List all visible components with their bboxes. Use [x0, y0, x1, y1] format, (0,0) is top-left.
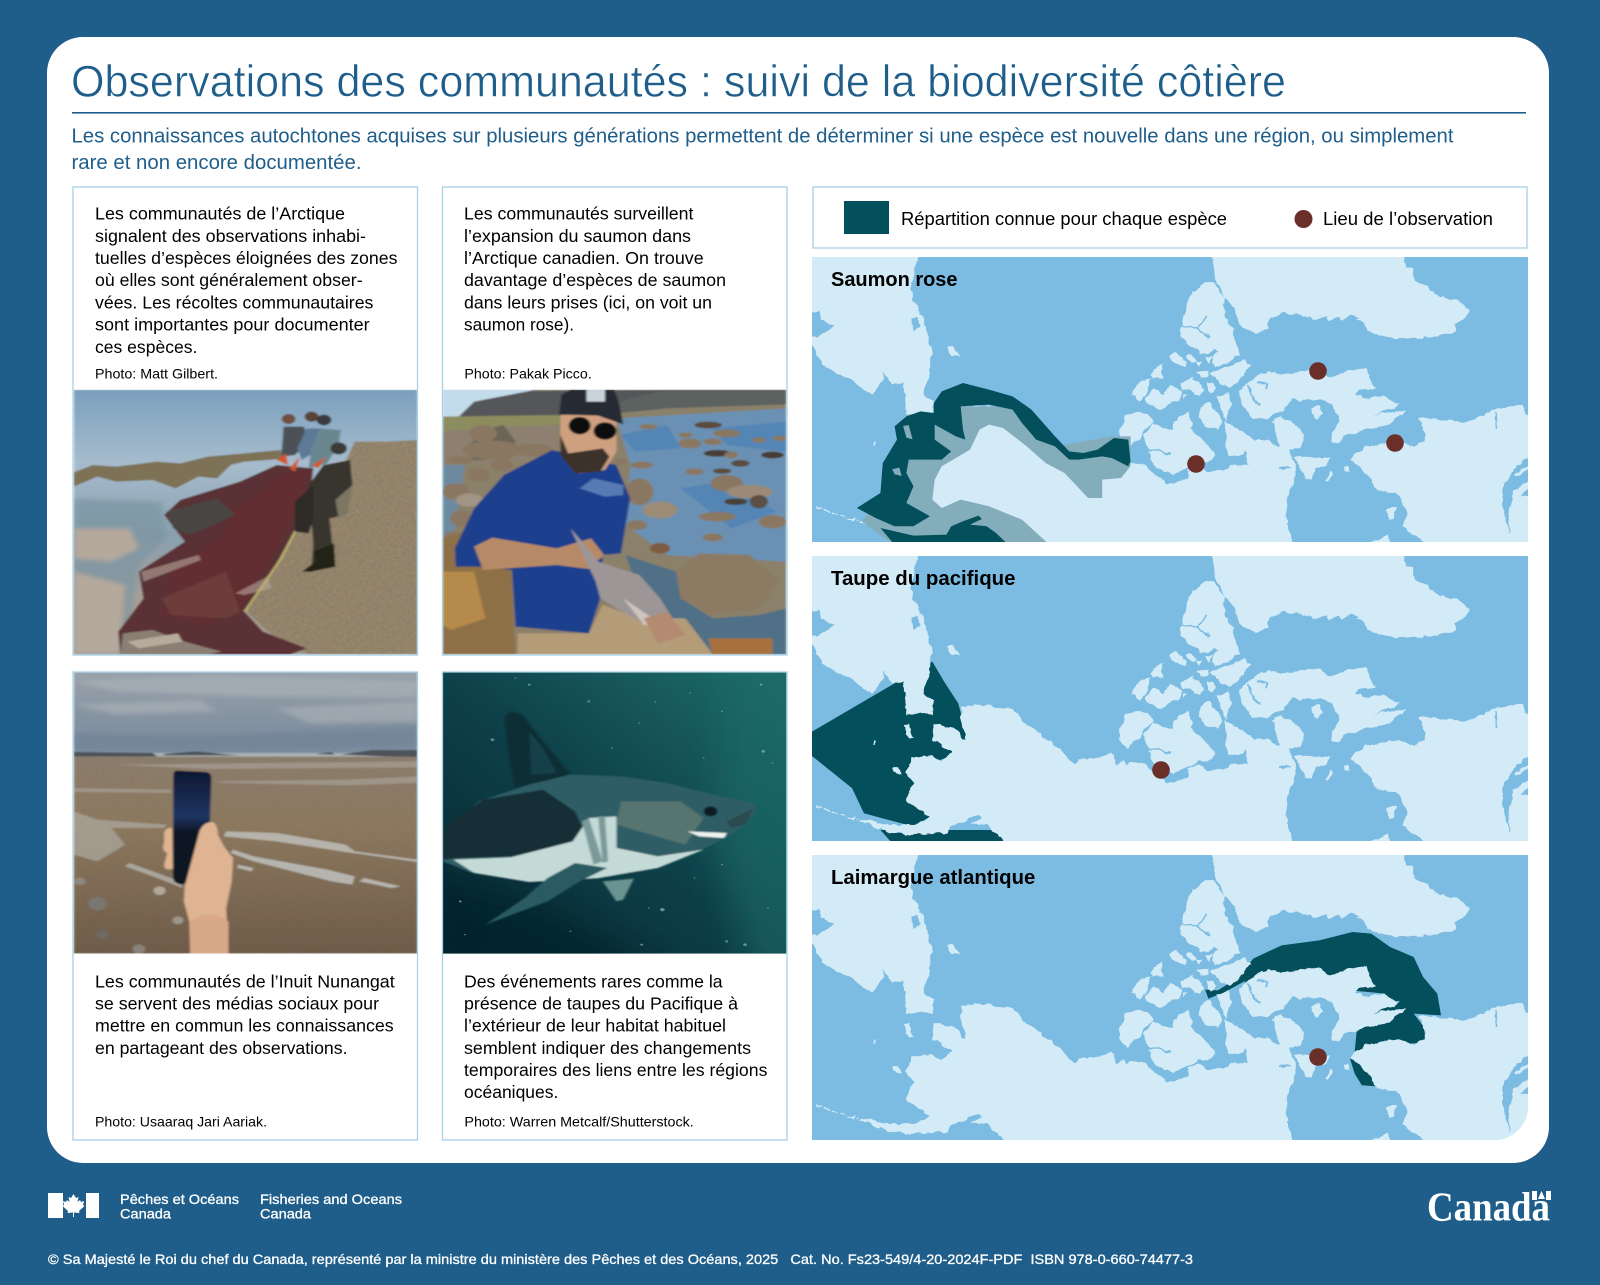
card 2 text: Les communautés surveillent: [464, 204, 694, 224]
Greenland shark range: [1205, 932, 1441, 1086]
card 2 caption: Photo: Pakak Picco.: [464, 366, 592, 382]
phone: [173, 771, 211, 884]
observation dot: [1309, 1048, 1327, 1066]
legend label: observation: Lieu de l’observation: [1323, 209, 1493, 229]
card 4 text: Des événements rares comme la: [464, 972, 723, 992]
card 1 caption: Photo: Matt Gilbert.: [95, 366, 218, 382]
card 4 text: temporaires des liens entre les régions: [464, 1060, 767, 1080]
panel: Pacific sleeper shark card: [443, 672, 786, 1126]
card 1 text: [95, 204, 398, 357]
subtitle: rare et non encore documentée.: [72, 151, 362, 174]
card 2 text: davantage d’espèces de saumon: [464, 270, 726, 290]
panel: salmon monitoring card: [442, 204, 786, 654]
department name French: [120, 1191, 239, 1222]
photo: hand holding a phone on a tidal flat: [74, 672, 417, 954]
legend: [813, 187, 1527, 248]
map title: Taupe du pacifique: [831, 567, 1016, 590]
department name English: [260, 1191, 402, 1222]
legend swatch: known distribution: [844, 201, 889, 234]
card 2 text: dans leurs prises (ici, on voit un: [464, 292, 712, 312]
photo: salmon shark underwater: [443, 672, 786, 954]
copyright line: © Sa Majesté le Roi du chef du Canada, représenté par la ministre du ministère des Pêches et des Océans, 2025 Cat. No. Fs23-549/4-20-2024F-PDF ISBN 978-0-660-74477-3: [48, 1251, 1193, 1267]
footer: government signature: [48, 1191, 402, 1222]
department name English: Canada: [260, 1206, 311, 1222]
card 2 text: saumon rose).: [464, 315, 574, 335]
card 2 text: l’Arctique canadien. On trouve: [464, 248, 704, 268]
card 4 text: semblent indiquer des changements: [464, 1038, 751, 1058]
Canada wordmark: Canada: [1427, 1184, 1550, 1230]
card 4 text: océaniques.: [464, 1082, 558, 1102]
card 2 text: [464, 204, 726, 335]
card 1 text: sont importantes pour documenter: [95, 315, 370, 335]
panel: social media card: [74, 672, 418, 1130]
card 4 text: [464, 972, 767, 1102]
title: Observations des communautés : suivi de la biodiversité côtière: [71, 58, 1286, 107]
map panel: pink salmon: [812, 257, 1528, 542]
map panel: Greenland shark: [812, 855, 1528, 1140]
map title: Laimargue atlantique: [831, 866, 1035, 889]
map title: Saumon rose: [831, 268, 958, 291]
subtitle: Les connaissances autochtones acquises sur plusieurs générations permettent de déterminer si une espèce est nouvelle dans une région, ou simplement: [72, 124, 1454, 148]
legend label: known distribution: Répartition connue pour chaque espèce: [901, 209, 1227, 229]
card 3 text: mettre en commun les connaissances: [95, 1016, 394, 1036]
river rocks: [442, 422, 786, 554]
legend dot: observation: [1294, 210, 1312, 228]
card 1 text: vées. Les récoltes communautaires: [95, 292, 373, 312]
card 1 text: ces espèces.: [95, 337, 197, 357]
sleeper shark range: [812, 662, 1008, 843]
observation dots: [1187, 362, 1404, 473]
photo: fishers hauling a net on the beach: [74, 390, 417, 654]
card 1 text: où elles sont généralement obser-: [95, 270, 363, 290]
card 4 caption: Photo: Warren Metcalf/Shutterstock.: [464, 1114, 694, 1130]
card 4 text: l’extérieur de leur habitat habituel: [464, 1016, 726, 1036]
photo: man holding a pink salmon in a rocky river: [443, 390, 786, 654]
card 1 text: tuelles d’espèces éloignées des zones: [95, 248, 398, 268]
card 3 caption: Photo: Usaaraq Jari Aariak.: [95, 1114, 267, 1130]
salmon range overlays: [857, 383, 1131, 542]
fishers: [277, 412, 352, 572]
card 3 text: se servent des médias sociaux pour: [95, 994, 379, 1014]
observation dot: [1152, 761, 1170, 779]
subtitle: [72, 124, 1454, 174]
card 4 text: présence de taupes du Pacifique à: [464, 994, 738, 1014]
department name English: Fisheries and Oceans: [260, 1191, 402, 1207]
Canadian flag symbol: [48, 1193, 99, 1218]
card 2 text: l’expansion du saumon dans: [464, 226, 691, 246]
card 3 text: en partageant des observations.: [95, 1038, 348, 1058]
card 3 text: [95, 972, 395, 1058]
shark: [443, 711, 756, 925]
card 1 text: signalent des observations inhabi-: [95, 226, 366, 246]
hand: [163, 822, 233, 954]
title rule: [72, 112, 1526, 114]
map panel: Pacific sleeper shark: [812, 556, 1528, 841]
card 1 text: Les communautés de l’Arctique: [95, 204, 345, 224]
department name French: Canada: [120, 1206, 171, 1222]
card 3 text: Les communautés de l’Inuit Nunangat: [95, 972, 395, 992]
department name French: Pêches et Océans: [120, 1191, 239, 1207]
panel: Arctic communities card: [74, 204, 418, 654]
